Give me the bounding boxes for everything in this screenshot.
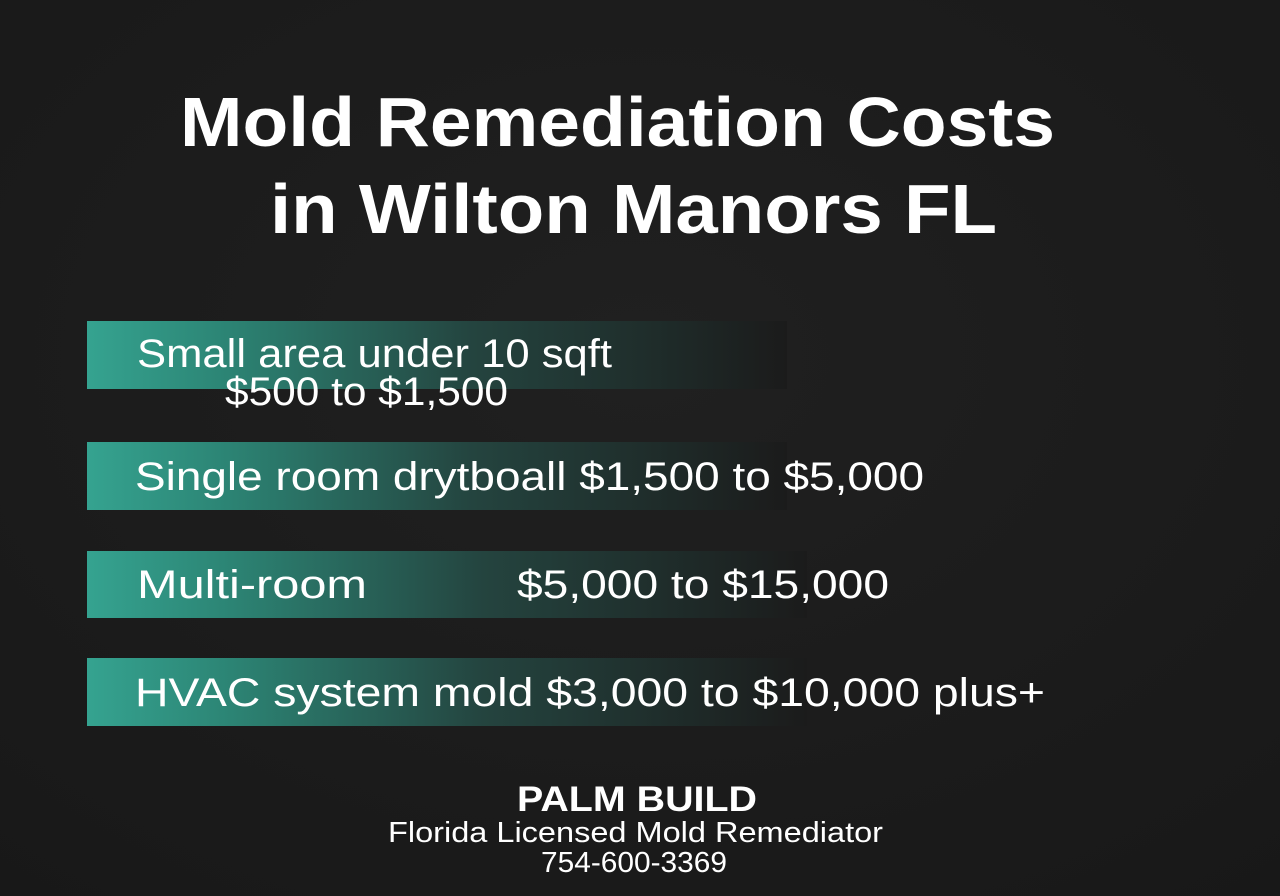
panel: small area (87, 321, 787, 414)
panel: multi-room: $5,000 to $15,000 (517, 563, 889, 607)
footer (388, 780, 883, 879)
footer: PALM BUILD (517, 780, 757, 819)
panel: single room (87, 442, 924, 510)
panel: multi-room: Multi-room (137, 563, 367, 607)
panel: single room: Single room drytboall $1,500 to $5,000 (135, 455, 924, 499)
footer: Florida Licensed Mold Remediator (388, 817, 883, 849)
footer: 754-600-3369 (541, 847, 727, 879)
title (180, 83, 1055, 248)
panel: HVAC (87, 658, 1045, 726)
panel: small area: $500 to $1,500 (225, 370, 508, 414)
panel: small area: Small area under 10 sqft (137, 332, 612, 376)
title: Mold Remediation Costs (180, 83, 1055, 161)
panel: HVAC: HVAC system mold $3,000 to $10,000 plus+ (135, 671, 1045, 715)
panel: multi-room (87, 551, 889, 618)
title: in Wilton Manors FL (270, 170, 997, 248)
